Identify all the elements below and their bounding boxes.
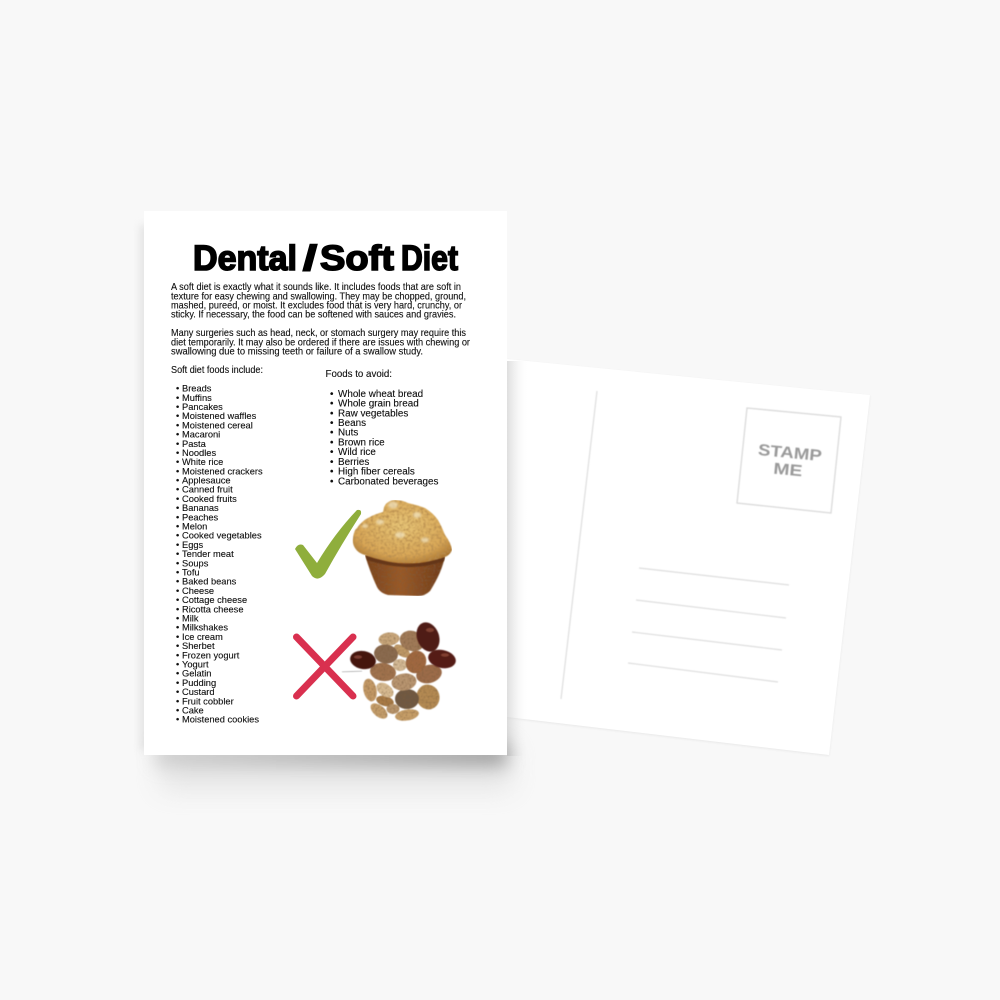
list: soft diet foods: Melon: [182, 522, 207, 532]
list: soft diet foods: Sherbet: [182, 641, 215, 651]
list: foods to avoid: Nuts: [338, 428, 358, 439]
list: soft diet foods: •: [176, 687, 179, 697]
list: soft diet foods: •: [176, 448, 179, 458]
list: soft diet foods: •: [176, 466, 179, 476]
list: soft diet foods: Pancakes: [182, 402, 223, 412]
list: soft diet foods: Fruit cobbler: [182, 696, 234, 706]
list: soft diet foods: Gelatin: [182, 669, 211, 679]
list: foods to avoid: Beans: [338, 418, 366, 429]
intro paragraph 1: sticky. If necessary, the food can be softened with sauces and gravies.: [171, 309, 456, 321]
list: soft diet foods: Muffins: [182, 393, 212, 403]
heading: soft diet foods: Soft diet foods include:: [171, 364, 263, 376]
stamp text: ME: [773, 461, 803, 480]
list: foods to avoid: •: [330, 476, 334, 487]
list: soft diet foods: Soups: [182, 558, 209, 568]
list: soft diet foods: •: [176, 604, 179, 614]
list: foods to avoid: •: [330, 389, 334, 400]
heading: foods to avoid: Foods to avoid:: [326, 368, 392, 380]
list: soft diet foods: Cheese: [182, 586, 214, 596]
list: soft diet foods: •: [176, 577, 179, 587]
list: foods to avoid: •: [330, 447, 334, 458]
list: soft diet foods: Applesauce: [182, 476, 231, 486]
title: [193, 239, 458, 278]
panel: diet card: [144, 211, 507, 755]
list: soft diet foods: Milkshakes: [182, 623, 228, 633]
list: soft diet foods: •: [176, 494, 179, 504]
list: foods to avoid: Berries: [338, 457, 369, 468]
list: foods to avoid: High fiber cereals: [338, 467, 415, 478]
intro paragraph 1: texture for easy chewing and swallowing. They may be chopped, ground,: [171, 290, 466, 302]
list: foods to avoid: Raw vegetables: [338, 408, 408, 419]
list: soft diet foods: Macaroni: [182, 430, 220, 440]
list: soft diet foods: •: [176, 457, 179, 467]
list: soft diet foods: •: [176, 411, 179, 421]
list: foods to avoid: Wild rice: [338, 447, 376, 458]
list: soft diet foods: Ricotta cheese: [182, 604, 244, 614]
list: soft diet foods: Noodles: [182, 448, 216, 458]
list: soft diet foods: Pudding: [182, 678, 216, 688]
list: soft diet foods: Tender meat: [182, 549, 234, 559]
list: soft diet foods: •: [176, 549, 179, 559]
list: foods to avoid: •: [330, 428, 334, 439]
card shadow: [140, 225, 529, 790]
list: soft diet foods: •: [176, 660, 179, 670]
list: soft diet foods: Moistened waffles: [182, 411, 257, 421]
intro paragraph 1: A soft diet is exactly what it sounds like. It includes foods that are soft in: [171, 281, 461, 293]
list: soft diet foods: Moistened crackers: [182, 466, 263, 476]
list: soft diet foods: •: [176, 540, 179, 550]
icon: muffin: [353, 500, 452, 596]
list: foods to avoid: •: [330, 418, 334, 429]
list: soft diet foods: Cottage cheese: [182, 595, 247, 605]
list: soft diet foods: Tofu: [182, 568, 200, 578]
icon: red cross: [296, 637, 353, 696]
list: soft diet foods: Yogurt: [182, 660, 209, 670]
list: soft diet foods: Ice cream: [182, 632, 223, 642]
list: soft diet foods: Bananas: [182, 503, 219, 513]
list: soft diet foods: White rice: [182, 457, 223, 467]
list: soft diet foods: •: [176, 531, 179, 541]
list: soft diet foods: Moistened cookies: [182, 715, 259, 725]
panel: postcard back: [507, 359, 870, 756]
list: soft diet foods: Custard: [182, 687, 215, 697]
list: soft diet foods: •: [176, 439, 179, 449]
list: soft diet foods: •: [176, 402, 179, 412]
list: soft diet foods: Moistened cereal: [182, 420, 253, 430]
list: soft diet foods: •: [176, 558, 179, 568]
list: soft diet foods: •: [176, 706, 179, 716]
list: soft diet foods: •: [176, 384, 179, 394]
icon: nuts: [342, 619, 458, 723]
list: soft diet foods: •: [176, 522, 179, 532]
intro paragraph 2: diet temporarily. It may also be ordered if there are issues with chewing or: [171, 336, 470, 348]
list: foods to avoid: •: [330, 408, 334, 419]
list: foods to avoid: Carbonated beverages: [338, 476, 439, 487]
list: soft diet foods: •: [176, 678, 179, 688]
list: soft diet foods: •: [176, 568, 179, 578]
list: foods to avoid: Whole wheat bread: [338, 389, 423, 400]
list: soft diet foods: •: [176, 503, 179, 513]
list: soft diet foods: [176, 384, 263, 725]
list: soft diet foods: •: [176, 715, 179, 725]
list: soft diet foods: Milk: [182, 614, 199, 624]
intro paragraph 2: swallowing due to missing teeth or failure of a swallow study.: [171, 346, 423, 358]
list: soft diet foods: Pasta: [182, 439, 207, 449]
list: soft diet foods: Cooked fruits: [182, 494, 237, 504]
list: soft diet foods: Cooked vegetables: [182, 531, 262, 541]
stamp text: STAMP: [757, 442, 823, 465]
list: foods to avoid: •: [330, 438, 334, 448]
intro paragraph 1: mashed, pureed, or moist. It excludes food that is very hard, crunchy, or: [171, 299, 462, 311]
list: soft diet foods: •: [176, 614, 179, 624]
list: foods to avoid: •: [330, 398, 334, 410]
list: soft diet foods: Eggs: [182, 540, 204, 550]
list: soft diet foods: •: [176, 641, 179, 651]
list: foods to avoid: •: [330, 467, 334, 478]
intro paragraph 2: Many surgeries such as head, neck, or stomach surgery may require this: [171, 327, 466, 339]
list: soft diet foods: Breads: [182, 384, 212, 394]
list: foods to avoid: •: [330, 457, 334, 468]
title: Dental: [193, 239, 297, 278]
icon: green check mark: [295, 510, 361, 579]
list: soft diet foods: Canned fruit: [182, 485, 233, 495]
list: foods to avoid: [330, 389, 439, 487]
list: soft diet foods: •: [176, 623, 179, 633]
list: soft diet foods: Cake: [182, 706, 204, 716]
title: Soft: [320, 239, 394, 278]
stamp text: [757, 442, 823, 480]
list: soft diet foods: •: [176, 669, 179, 679]
list: soft diet foods: •: [176, 393, 179, 403]
title: Diet: [401, 239, 458, 278]
intro paragraph 2: [171, 327, 470, 358]
list: soft diet foods: •: [176, 512, 179, 522]
list: soft diet foods: •: [176, 485, 179, 495]
list: foods to avoid: Whole grain bread: [338, 398, 419, 410]
stamp box: [737, 408, 841, 513]
address lines: [628, 568, 789, 682]
list: soft diet foods: •: [176, 476, 179, 486]
postcard divider line: [561, 391, 597, 699]
intro paragraph 1: [171, 281, 466, 321]
list: soft diet foods: Peaches: [182, 512, 219, 522]
list: foods to avoid: Brown rice: [338, 438, 385, 448]
list: soft diet foods: •: [176, 586, 179, 596]
title: /: [303, 239, 317, 278]
list: soft diet foods: •: [176, 595, 179, 605]
list: soft diet foods: •: [176, 650, 179, 660]
list: soft diet foods: •: [176, 430, 179, 440]
list: soft diet foods: •: [176, 696, 179, 706]
list: soft diet foods: Baked beans: [182, 577, 237, 587]
list: soft diet foods: •: [176, 632, 179, 642]
list: soft diet foods: Frozen yogurt: [182, 650, 240, 660]
list: soft diet foods: •: [176, 420, 179, 430]
